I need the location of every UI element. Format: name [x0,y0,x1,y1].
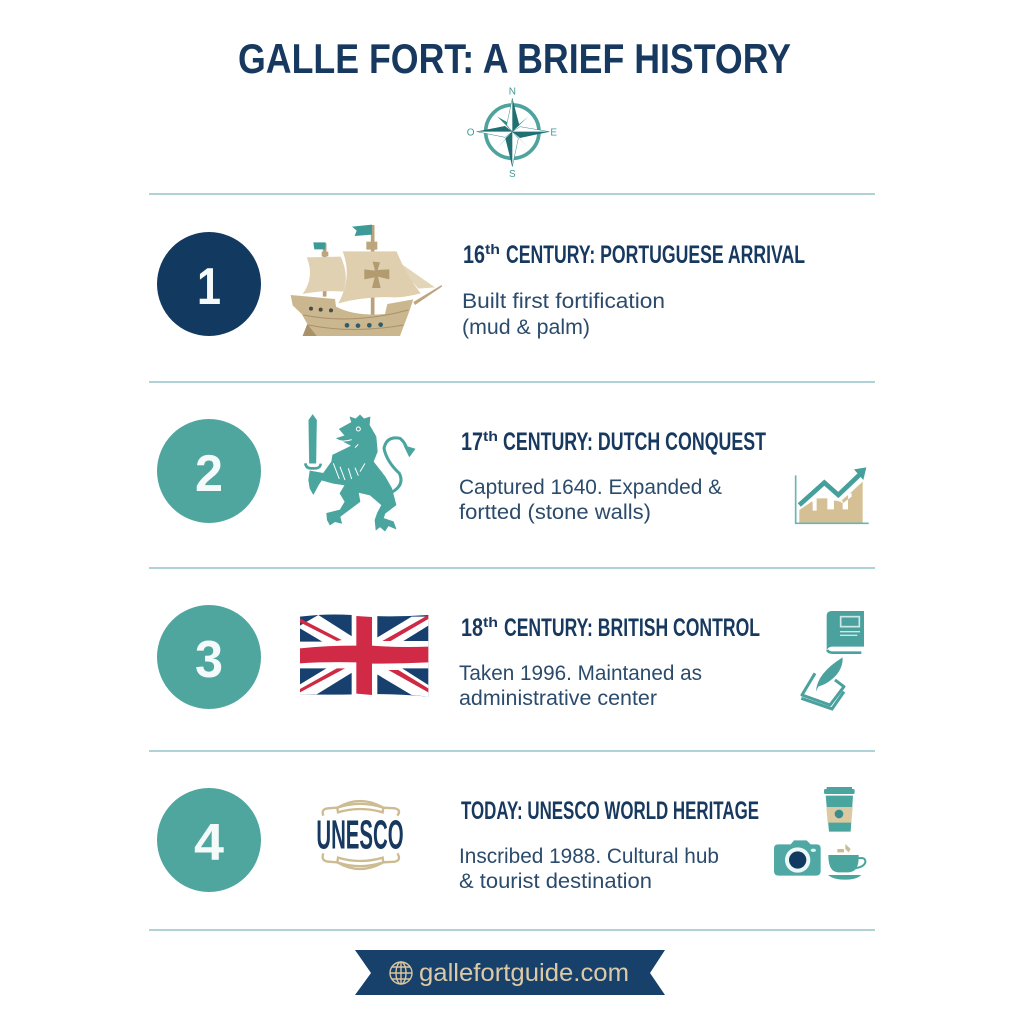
heading: 16th century [463,241,805,269]
heading: 16th century: th [485,241,500,257]
number badge 4 [157,788,261,892]
panel: 17th century [157,414,869,531]
icon: lion with sword [305,414,415,531]
heading: today: TODAY: UNESCO WORLD HERITAGE [461,797,759,825]
heading: 17th century [461,428,766,456]
text: today description [459,845,719,893]
text: today description: Inscribed 1988. Cultural hub [459,845,719,868]
panel: 16th century [157,225,805,339]
number badge 1: 1 [197,258,221,316]
text: 17th century description [459,476,722,524]
panel: today [157,787,865,893]
number badge 3: 3 [195,631,223,689]
icon: takeaway coffee cup [824,787,855,832]
panel: 18th century [157,605,864,710]
icon: camera [774,840,821,876]
heading: 18th century: 18 [461,614,483,642]
number badge 2: 2 [195,445,223,503]
text: 16th century description [462,290,665,339]
icon: compass rose: N [509,87,516,98]
number badge 3 [157,605,261,709]
heading: 18th century: CENTURY: BRITISH CONTROL [504,614,760,642]
heading: 18th century [461,614,760,642]
icon: union jack flag [300,614,428,697]
title: GALLE FORT: A BRIEF HISTORY [238,35,791,82]
icon: compass rose: E [550,128,557,139]
number badge 1 [157,232,261,336]
text: 18th century description: administrative center [459,687,657,710]
heading: 17th century: 17 [461,428,483,456]
text: 17th century description: fortted (stone walls) [459,501,651,524]
heading: 17th century: CENTURY: DUTCH CONQUEST [503,428,766,456]
website address: gallefortguide.com [419,959,629,987]
icon: rising chart [796,467,869,523]
text: 18th century description [459,662,702,710]
icon: book [827,611,864,653]
text: 18th century description: Taken 1996. Maintaned as [459,662,702,685]
icon: UNESCO badge [316,801,404,869]
heading: 18th century: th [483,614,498,630]
number badge 2 [157,419,261,523]
heading: 16th century: 16 [463,241,485,269]
icon: globe [390,962,412,984]
text: 16th century description: (mud & palm) [462,316,590,339]
icon: UNESCO badge: UNESCO [316,811,404,857]
icon: compass rose: O [467,128,475,139]
icon: quill and paper [801,657,844,709]
icon: ship [291,225,442,336]
footer ribbon [355,950,665,995]
heading: 16th century: CENTURY: PORTUGUESE ARRIVAL [506,241,805,269]
text: today description: & tourist destination [459,870,652,893]
heading: 17th century: th [483,428,498,444]
icon: compass rose [467,87,557,180]
icon: coffee cup and saucer [828,844,865,880]
icon: compass rose: S [509,169,516,180]
number badge 4: 4 [194,814,224,872]
text: 16th century description: Built first fortification [462,290,665,313]
text: 17th century description: Captured 1640. Expanded & [459,476,722,499]
